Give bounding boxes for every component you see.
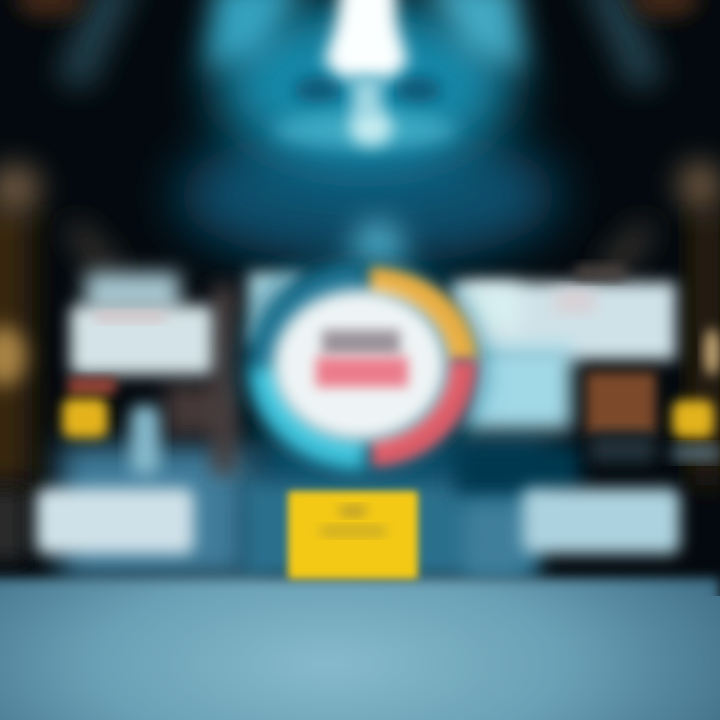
lower ceiling band	[273, 112, 457, 148]
red tab	[68, 378, 116, 394]
white light column	[324, 0, 408, 78]
card pink heading	[95, 312, 165, 322]
donut white hole	[273, 289, 447, 441]
corner glow: left brown	[15, 0, 85, 18]
pillar cap	[678, 161, 720, 209]
ceiling shadow: left	[294, 76, 342, 104]
donut center label	[273, 289, 447, 441]
panel: center right backing card	[450, 265, 676, 430]
brown strip behind card	[212, 285, 236, 475]
light teal section	[462, 345, 572, 430]
donut backing	[246, 259, 478, 475]
pillar glow	[704, 328, 720, 376]
white light neck	[352, 78, 382, 118]
donut segment: upper left blue	[268, 282, 362, 367]
pillar base	[0, 490, 26, 560]
pillar cap	[0, 164, 41, 212]
badge shadow	[672, 446, 720, 460]
donut segment: red	[372, 360, 462, 452]
top highlight	[465, 285, 520, 330]
panel: center left pale block	[248, 272, 305, 345]
card text top	[340, 506, 366, 516]
panel: upper left card	[68, 272, 236, 475]
corner glow: right brown	[630, 0, 700, 18]
floor backdrop	[60, 445, 580, 580]
pillar brace	[595, 222, 658, 280]
pale blue column	[130, 405, 160, 475]
pillar glow	[0, 326, 26, 386]
donut chart	[246, 259, 478, 475]
left brown pillar	[0, 164, 125, 560]
panel: right brown block	[586, 372, 656, 463]
floor	[0, 578, 720, 720]
card body	[70, 305, 213, 375]
panel: lower right card	[522, 488, 680, 554]
ceiling streak: right grey	[580, 0, 665, 90]
ceiling streak: right teal	[425, 0, 525, 70]
center backlight	[352, 220, 404, 276]
block shadow	[590, 435, 655, 463]
pillar brace	[62, 222, 125, 280]
haze above card	[575, 265, 625, 280]
pink smudge	[555, 290, 595, 312]
label grey heading	[322, 330, 400, 355]
card haze	[85, 272, 180, 312]
donut segment: orange	[370, 282, 462, 360]
panel: lower left card	[36, 488, 194, 554]
panel: yellow center card	[288, 491, 418, 579]
ceiling glow	[15, 0, 700, 276]
icon: left yellow badge	[62, 398, 108, 438]
brown block behind card	[165, 385, 230, 435]
card text bottom	[320, 526, 386, 536]
icon: right yellow badge	[672, 400, 720, 460]
ceiling streak: left teal	[205, 0, 305, 70]
ceiling streak: left grey	[55, 0, 140, 90]
wide pale card	[450, 282, 676, 360]
white light base	[349, 110, 393, 146]
donut segment: blue	[266, 367, 364, 453]
label red bar	[316, 357, 408, 387]
right brown pillar	[595, 161, 720, 485]
ceiling shadow: right	[394, 76, 442, 104]
